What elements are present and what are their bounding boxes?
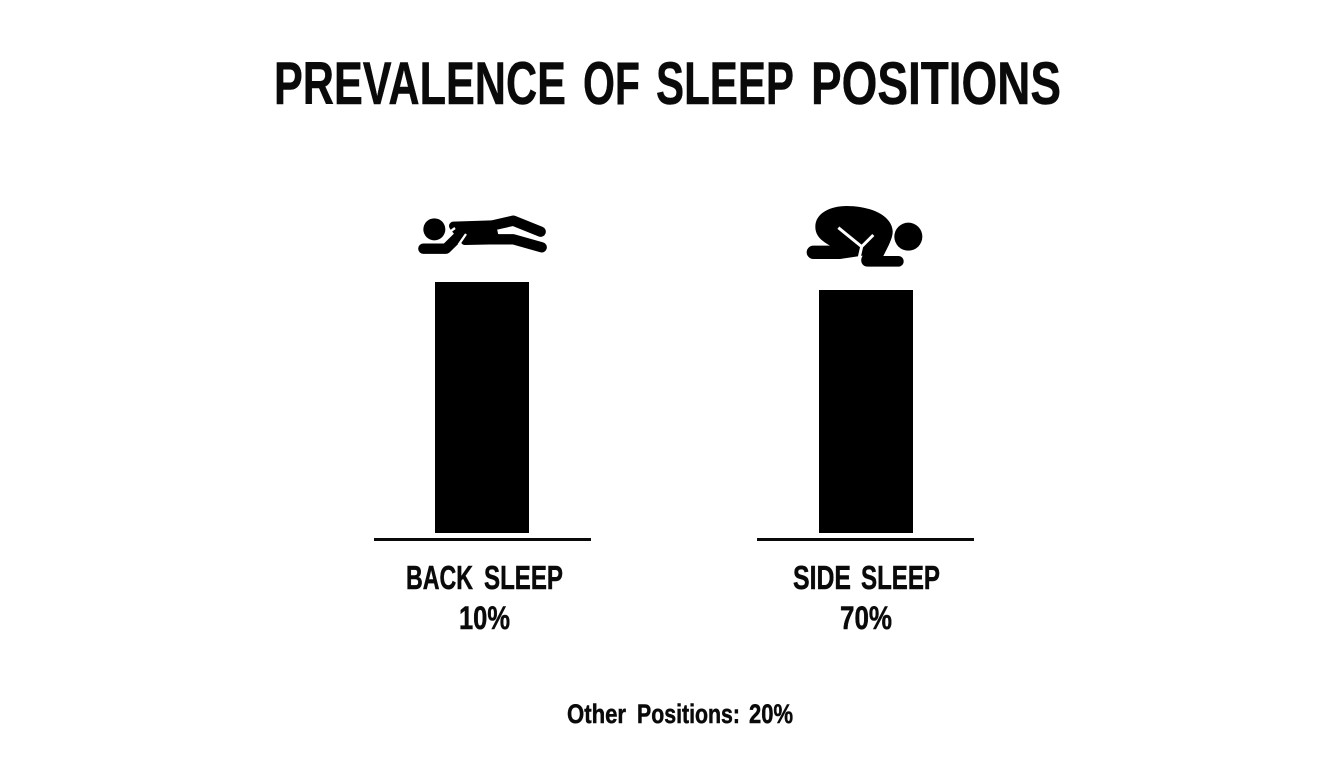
title: OF bbox=[583, 50, 640, 117]
axis line: back sleep bbox=[374, 538, 591, 541]
title: SLEEP bbox=[656, 50, 794, 117]
panel: back sleep bbox=[374, 218, 591, 636]
footnote: other positions: Positions: bbox=[637, 699, 740, 729]
bar: side sleep bbox=[819, 290, 913, 533]
label: back sleep bbox=[406, 559, 563, 596]
label: side sleep: SLEEP bbox=[861, 559, 940, 596]
panel: side sleep bbox=[757, 206, 974, 636]
icon: person lying on stomach bbox=[423, 218, 542, 249]
value: back sleep 10%: 10% bbox=[459, 600, 510, 636]
value: side sleep 70%: 70% bbox=[840, 600, 892, 636]
footnote: other positions bbox=[567, 699, 793, 729]
bar: back sleep bbox=[435, 282, 529, 533]
label: back sleep: SLEEP bbox=[484, 559, 563, 596]
axis line: side sleep bbox=[757, 538, 974, 541]
footnote: other positions: 20% bbox=[749, 699, 793, 729]
icon: person curled on side bbox=[807, 206, 922, 267]
footnote: other positions: Other bbox=[567, 699, 626, 729]
label: side sleep bbox=[793, 559, 940, 596]
title: PREVALENCE bbox=[274, 50, 566, 117]
label: side sleep: SIDE bbox=[793, 559, 851, 596]
title: POSITIONS bbox=[811, 50, 1061, 117]
title bbox=[274, 50, 1061, 117]
label: back sleep: BACK bbox=[406, 559, 473, 596]
